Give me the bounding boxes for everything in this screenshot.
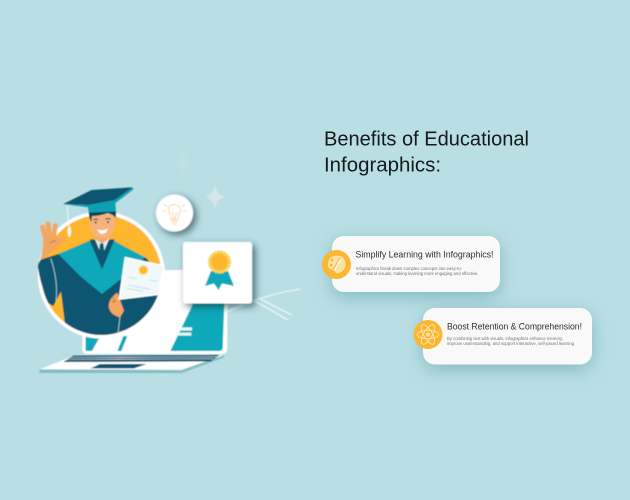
sleeve line <box>118 317 120 333</box>
holding hand <box>109 293 124 317</box>
laptop screen frame <box>82 270 227 354</box>
cap base <box>87 199 116 213</box>
gold disc <box>41 215 161 335</box>
teal yoke <box>58 240 145 294</box>
waving hand <box>43 224 63 243</box>
face <box>90 214 115 239</box>
tie <box>99 243 105 260</box>
cap top <box>63 187 133 205</box>
circle ring <box>38 211 165 339</box>
card 1 body: understand visuals, making learning more engaging and effective. <box>356 271 478 276</box>
laptop base edge <box>39 355 224 373</box>
shirt <box>95 239 109 256</box>
card 1 body: Infographics break down complex concepts into easy-to- <box>356 266 463 271</box>
hair <box>89 211 116 222</box>
laptop <box>39 270 227 373</box>
bulb icon <box>163 204 186 224</box>
card 2 heading: Boost Retention & Comprehension! <box>447 322 582 332</box>
card 1 body <box>356 266 478 276</box>
laptop screen teal panels <box>86 303 224 351</box>
graduate figure <box>30 187 170 340</box>
card 2 body <box>447 336 575 346</box>
title <box>324 128 529 176</box>
diploma <box>118 257 165 300</box>
card 1: simplify learning <box>322 236 500 292</box>
sparkle: faint <box>173 151 193 176</box>
neck <box>95 229 108 243</box>
card 2 body: improve understanding, and support interactive, self-paced learning <box>447 341 575 346</box>
card 1 heading: Simplify Learning with Infographics! <box>356 250 494 260</box>
sparkle: bright <box>205 185 225 209</box>
laptop base <box>39 355 224 370</box>
diploma lines <box>127 277 157 291</box>
smile <box>97 229 108 234</box>
eyes and brows <box>93 219 111 220</box>
diploma seal <box>138 265 148 275</box>
rosette <box>208 251 230 273</box>
collar <box>90 239 115 269</box>
hand wrinkle <box>49 241 56 244</box>
sleeve upper <box>38 254 63 306</box>
ribbon tails <box>205 271 234 290</box>
card 2 icon: atom <box>414 320 442 349</box>
gown <box>42 240 158 336</box>
tassel <box>67 206 69 227</box>
title: Infographics: <box>324 154 441 176</box>
card 2 body: By combining text with visuals, infographics enhance memory, <box>447 336 563 341</box>
cable lines <box>227 289 300 320</box>
title: Benefits of Educational <box>324 128 529 150</box>
trackpad <box>91 364 147 368</box>
illustration: graduate and laptop <box>37 186 300 374</box>
card 1 icon: palette <box>322 250 351 279</box>
card 2: boost retention <box>414 308 592 364</box>
ribbon badge card <box>183 242 252 304</box>
dark gown body <box>42 240 158 336</box>
infographic canvas <box>37 130 602 379</box>
keyboard <box>63 355 219 362</box>
laptop screen dashes <box>176 327 192 336</box>
lightbulb badge <box>156 194 193 232</box>
